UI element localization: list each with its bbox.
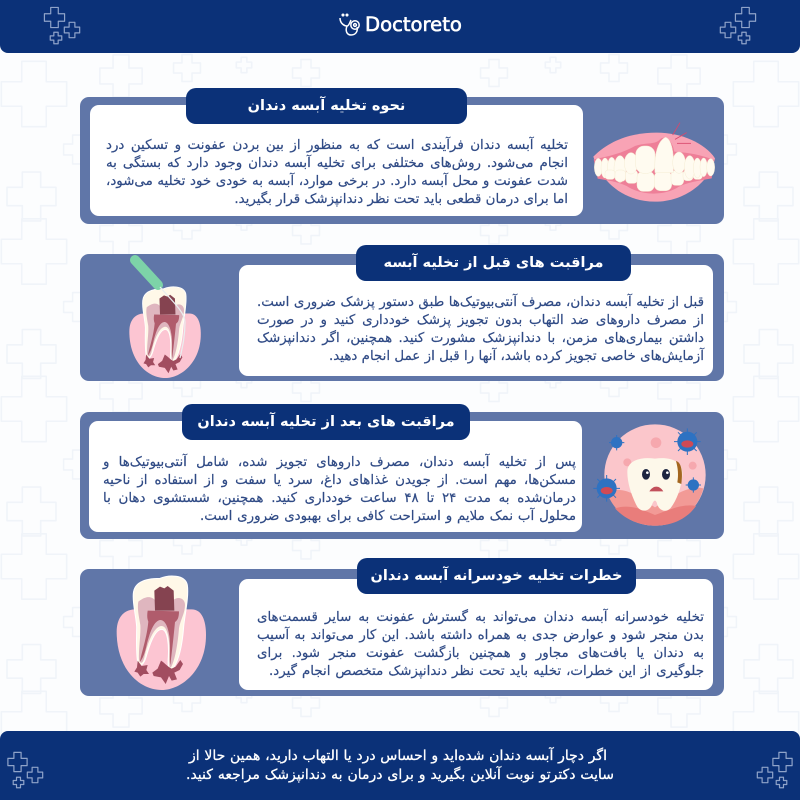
heading — [182, 404, 470, 440]
text block — [257, 608, 704, 679]
heading — [356, 245, 631, 281]
icon: stethoscope — [339, 14, 360, 36]
icon: crosses left — [7, 752, 44, 788]
call to action text: سایت دکترتو نوبت آنلاین بگیرید و برای درمان به دندانپزشک مراجعه کنید. — [186, 767, 614, 783]
text block — [102, 453, 576, 524]
text block: از مصرف داروهای ضد التهاب بدون تجویز پزشک خودداری کنید و در صورت — [257, 313, 704, 328]
text block: تخلیه آبسه دندان فرآیندی است که به منظور از بین بردن عفونت و تسکین درد — [106, 138, 568, 153]
heading: مراقبت های بعد از تخلیه آبسه دندان — [197, 414, 455, 430]
text block: شدت عفونت و محل آبسه دارد. در برخی موارد، آبسه به خودی خود تخلیه می‌شود، — [106, 174, 568, 189]
heading — [186, 88, 467, 124]
text block: مسکن‌ها، مهم است. از جویدن غذاهای داغ، سرد یا سفت و از استفاده از ناحیه — [103, 472, 576, 488]
text block — [106, 136, 568, 207]
icon: crosses right — [720, 6, 756, 44]
header bar — [0, 0, 800, 53]
text block: آزمایش‌های خاصی تجویز کرده باشد، آنها را قبل از عمل انجام دهید. — [329, 349, 704, 364]
icon: sick tooth with bacteria — [593, 424, 706, 526]
text block: داشتن بیماری‌های مزمن، با دندانپزشک مشورت کنید. همچنین، اگر دندانپزشک — [257, 331, 704, 346]
text block: درمان‌شده به مدت ۲۴ تا ۴۸ ساعت خودداری کنید. همچنین، شستشوی دهان با — [103, 490, 576, 506]
text block — [257, 293, 705, 364]
call to action text — [186, 746, 614, 783]
text block: محلول آب نمک ملایم و استراحت کافی برای بهبودی ضروری است. — [200, 508, 576, 524]
heading — [357, 558, 636, 594]
text block: تخلیه خودسرانه آبسه دندان می‌تواند به گسترش عفونت به سایر قسمت‌های — [257, 610, 704, 624]
heading: مراقبت های قبل از تخلیه آبسه — [384, 255, 603, 271]
text block: پس از تخلیه آبسه دندان، مصرف داروهای تجویز شده، شامل آنتی‌بیوتیک‌ها و — [103, 454, 576, 470]
icon: crosses right — [756, 752, 793, 788]
heading: خطرات تخلیه خودسرانه آبسه دندان — [371, 568, 622, 584]
text block: اما برای درمان قطعی باید تحت نظر دندانپزشک قرار بگیرید. — [234, 192, 568, 207]
icon: tooth root cross-section — [116, 576, 206, 690]
text block: به دندان یا بافت‌های مجاور و همچنین بازگشت عفونت منجر شود. برای — [257, 646, 704, 660]
panel: care after draining — [80, 404, 724, 539]
icon: crosses left — [44, 6, 80, 44]
call to action text: اگر دچار آبسه دندان شده‌اید و احساس درد یا التهاب دارید، همین حالا از — [189, 748, 607, 764]
text block: جلوگیری از این خطرات، تخلیه باید تحت نظر دندانپزشک متخصص انجام گیرد. — [269, 664, 704, 678]
logo wordmark: Doctoreto — [365, 13, 462, 36]
panel: care before draining — [80, 245, 724, 381]
text block: انجام می‌شود. روش‌های مختلفی برای تخلیه آبسه دندان وجود دارد که بستگی به — [106, 156, 568, 171]
icon: tooth with root canal file — [129, 255, 201, 378]
heading: نحوه تخلیه آبسه دندان — [248, 98, 405, 114]
panel: risks of self-draining — [80, 558, 724, 696]
footer bar — [0, 731, 800, 800]
logo — [339, 13, 462, 36]
text block: قبل از تخلیه آبسه دندان، مصرف آنتی‌بیوتیک‌ها طبق دستور پزشک ضروری است. — [257, 295, 704, 310]
text block: بدن منجر شود و عوارض جدی به همراه داشته باشد. این کار می‌تواند به آسیب — [257, 628, 704, 642]
icon: teeth and gums — [593, 122, 715, 202]
panel: how to drain — [80, 88, 724, 224]
